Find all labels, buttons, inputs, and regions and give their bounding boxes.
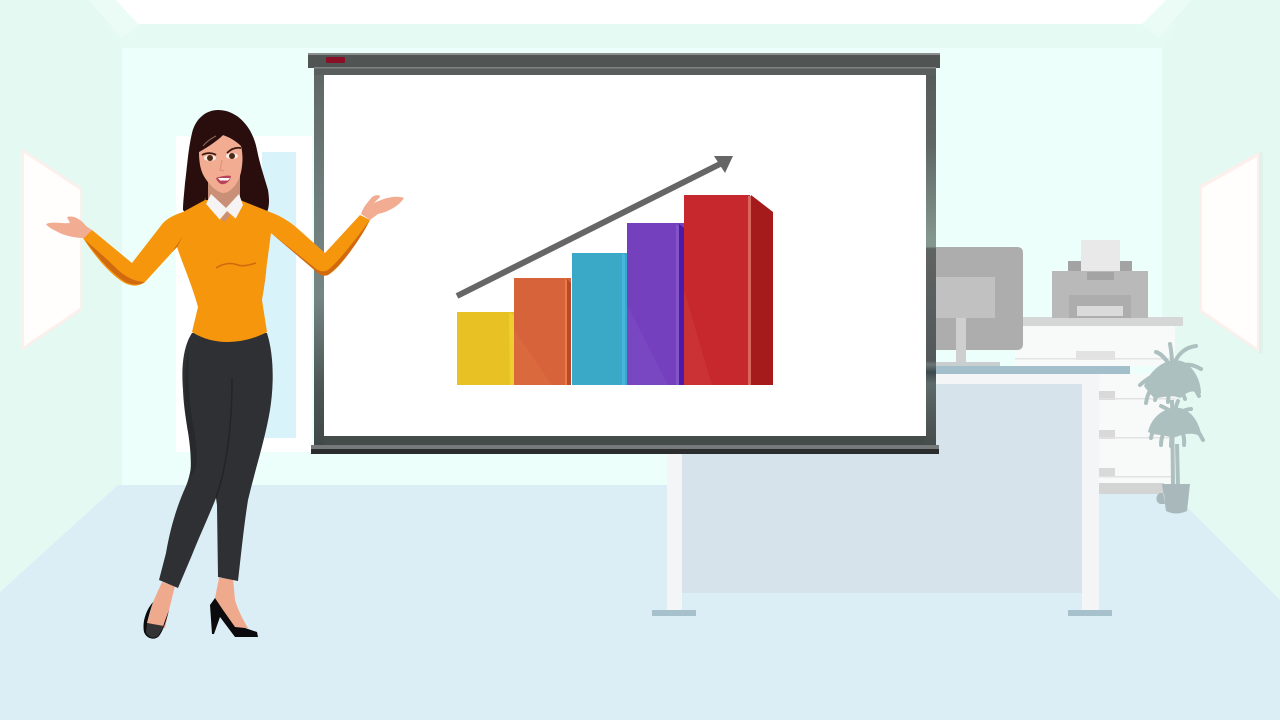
hair back [183, 110, 269, 228]
right hand [361, 195, 404, 220]
neck [208, 176, 240, 222]
presenter woman [46, 110, 404, 639]
pants shading [216, 378, 232, 498]
face [199, 135, 242, 193]
computer monitor [925, 247, 1023, 367]
bottom bar [311, 445, 939, 454]
fringe [198, 122, 241, 152]
red bar [684, 195, 773, 385]
upper crown [1140, 344, 1201, 403]
left wall picture [21, 148, 82, 351]
upward trend arrow [457, 156, 733, 296]
pants [159, 333, 273, 588]
left foot and shoe [143, 582, 175, 639]
printer [1052, 240, 1148, 318]
right wall picture [1200, 152, 1263, 354]
indicator light [326, 57, 345, 63]
eyes [204, 153, 238, 161]
back window [176, 136, 312, 452]
growth bar chart [457, 156, 773, 385]
right foot and shoe [210, 578, 258, 637]
desk [652, 366, 1130, 616]
lower crown [1151, 401, 1203, 446]
screen surface [324, 75, 926, 436]
yellow bar [457, 312, 514, 385]
hair highlight strand [203, 136, 216, 146]
mouth [216, 176, 231, 184]
sweater body and arms [83, 200, 370, 342]
nose [220, 160, 224, 171]
shirt collar [206, 194, 243, 220]
orange bar [514, 278, 571, 385]
plant stems [1170, 400, 1180, 486]
sweater shadows [85, 220, 370, 332]
projector screen [308, 53, 940, 454]
left hand [46, 216, 92, 238]
top roller bar [308, 53, 940, 68]
purple bar [627, 223, 684, 385]
screen frame [314, 68, 324, 446]
plant pot [1156, 484, 1190, 514]
bust fold line [216, 263, 256, 268]
lower crown centre [1148, 408, 1202, 438]
potted plant [1140, 344, 1203, 514]
teal bar [572, 253, 627, 385]
eyebrows [202, 148, 241, 155]
sweater neckline [204, 197, 244, 226]
upper crown centre [1144, 360, 1201, 398]
printer cabinet [1015, 317, 1183, 494]
